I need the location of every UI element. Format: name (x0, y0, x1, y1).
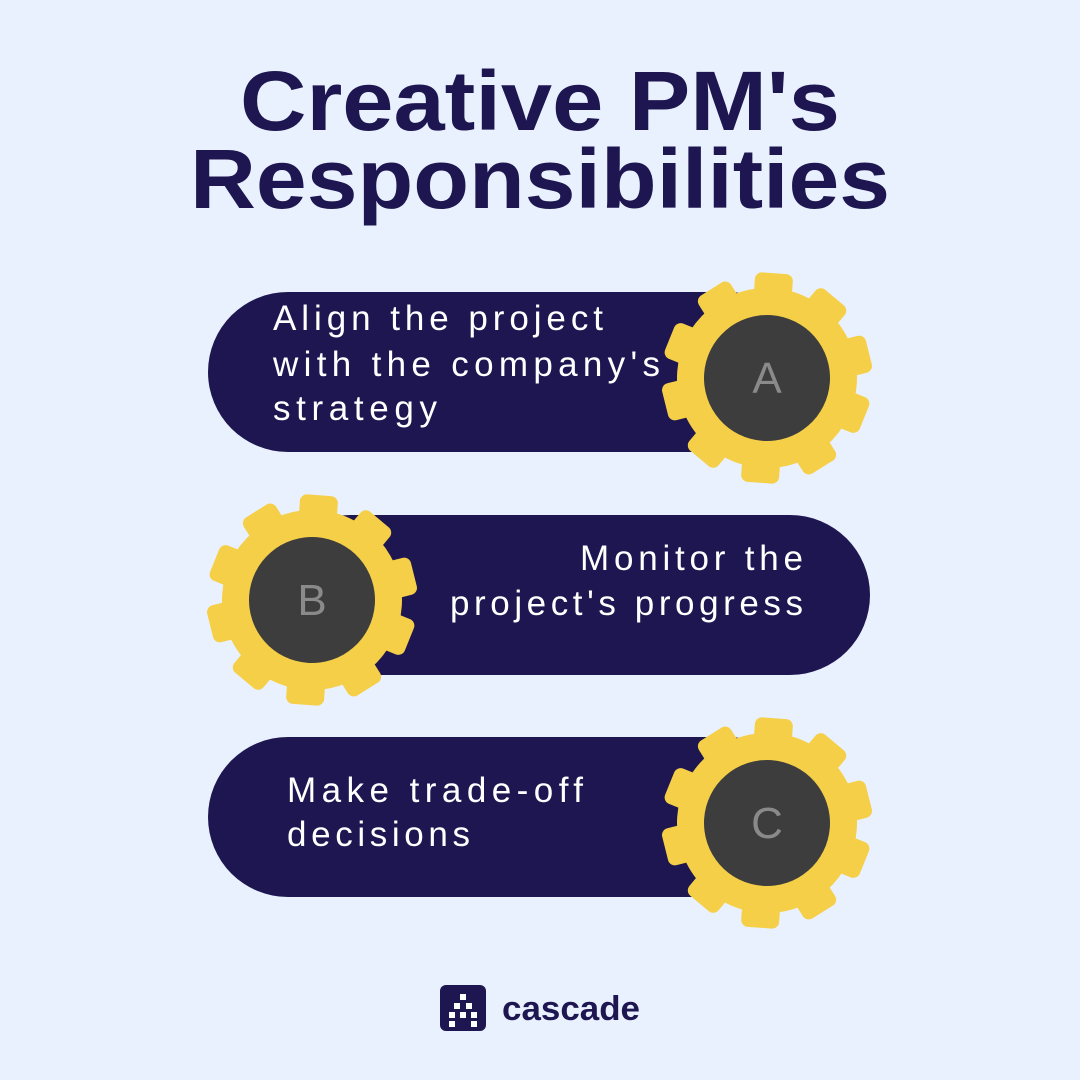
title: Responsibilities (190, 132, 890, 226)
panel: A (208, 266, 880, 490)
panel: C (208, 711, 880, 935)
text: B: Monitor the (580, 539, 803, 578)
text: A: Align the project (273, 299, 603, 338)
title (190, 54, 890, 226)
icon: gear B (199, 488, 425, 712)
text: B: project's progress (450, 584, 803, 623)
logo: cascade (502, 990, 640, 1028)
panel: B (199, 488, 870, 712)
icon: gear C: C (751, 799, 783, 848)
text: A (272, 299, 660, 428)
icon: gear C (654, 711, 880, 935)
text: C (287, 771, 583, 854)
text: A: with the company's (272, 345, 660, 384)
text: C: Make trade-off (287, 771, 583, 810)
icon: gear A: A (752, 354, 782, 403)
text: C: decisions (287, 815, 470, 854)
title: Creative PM's (240, 54, 840, 148)
text: B (450, 539, 803, 623)
text: A: strategy (273, 389, 438, 428)
icon: gear A (654, 266, 880, 490)
logo (440, 985, 640, 1031)
icon: gear B: B (297, 576, 327, 625)
